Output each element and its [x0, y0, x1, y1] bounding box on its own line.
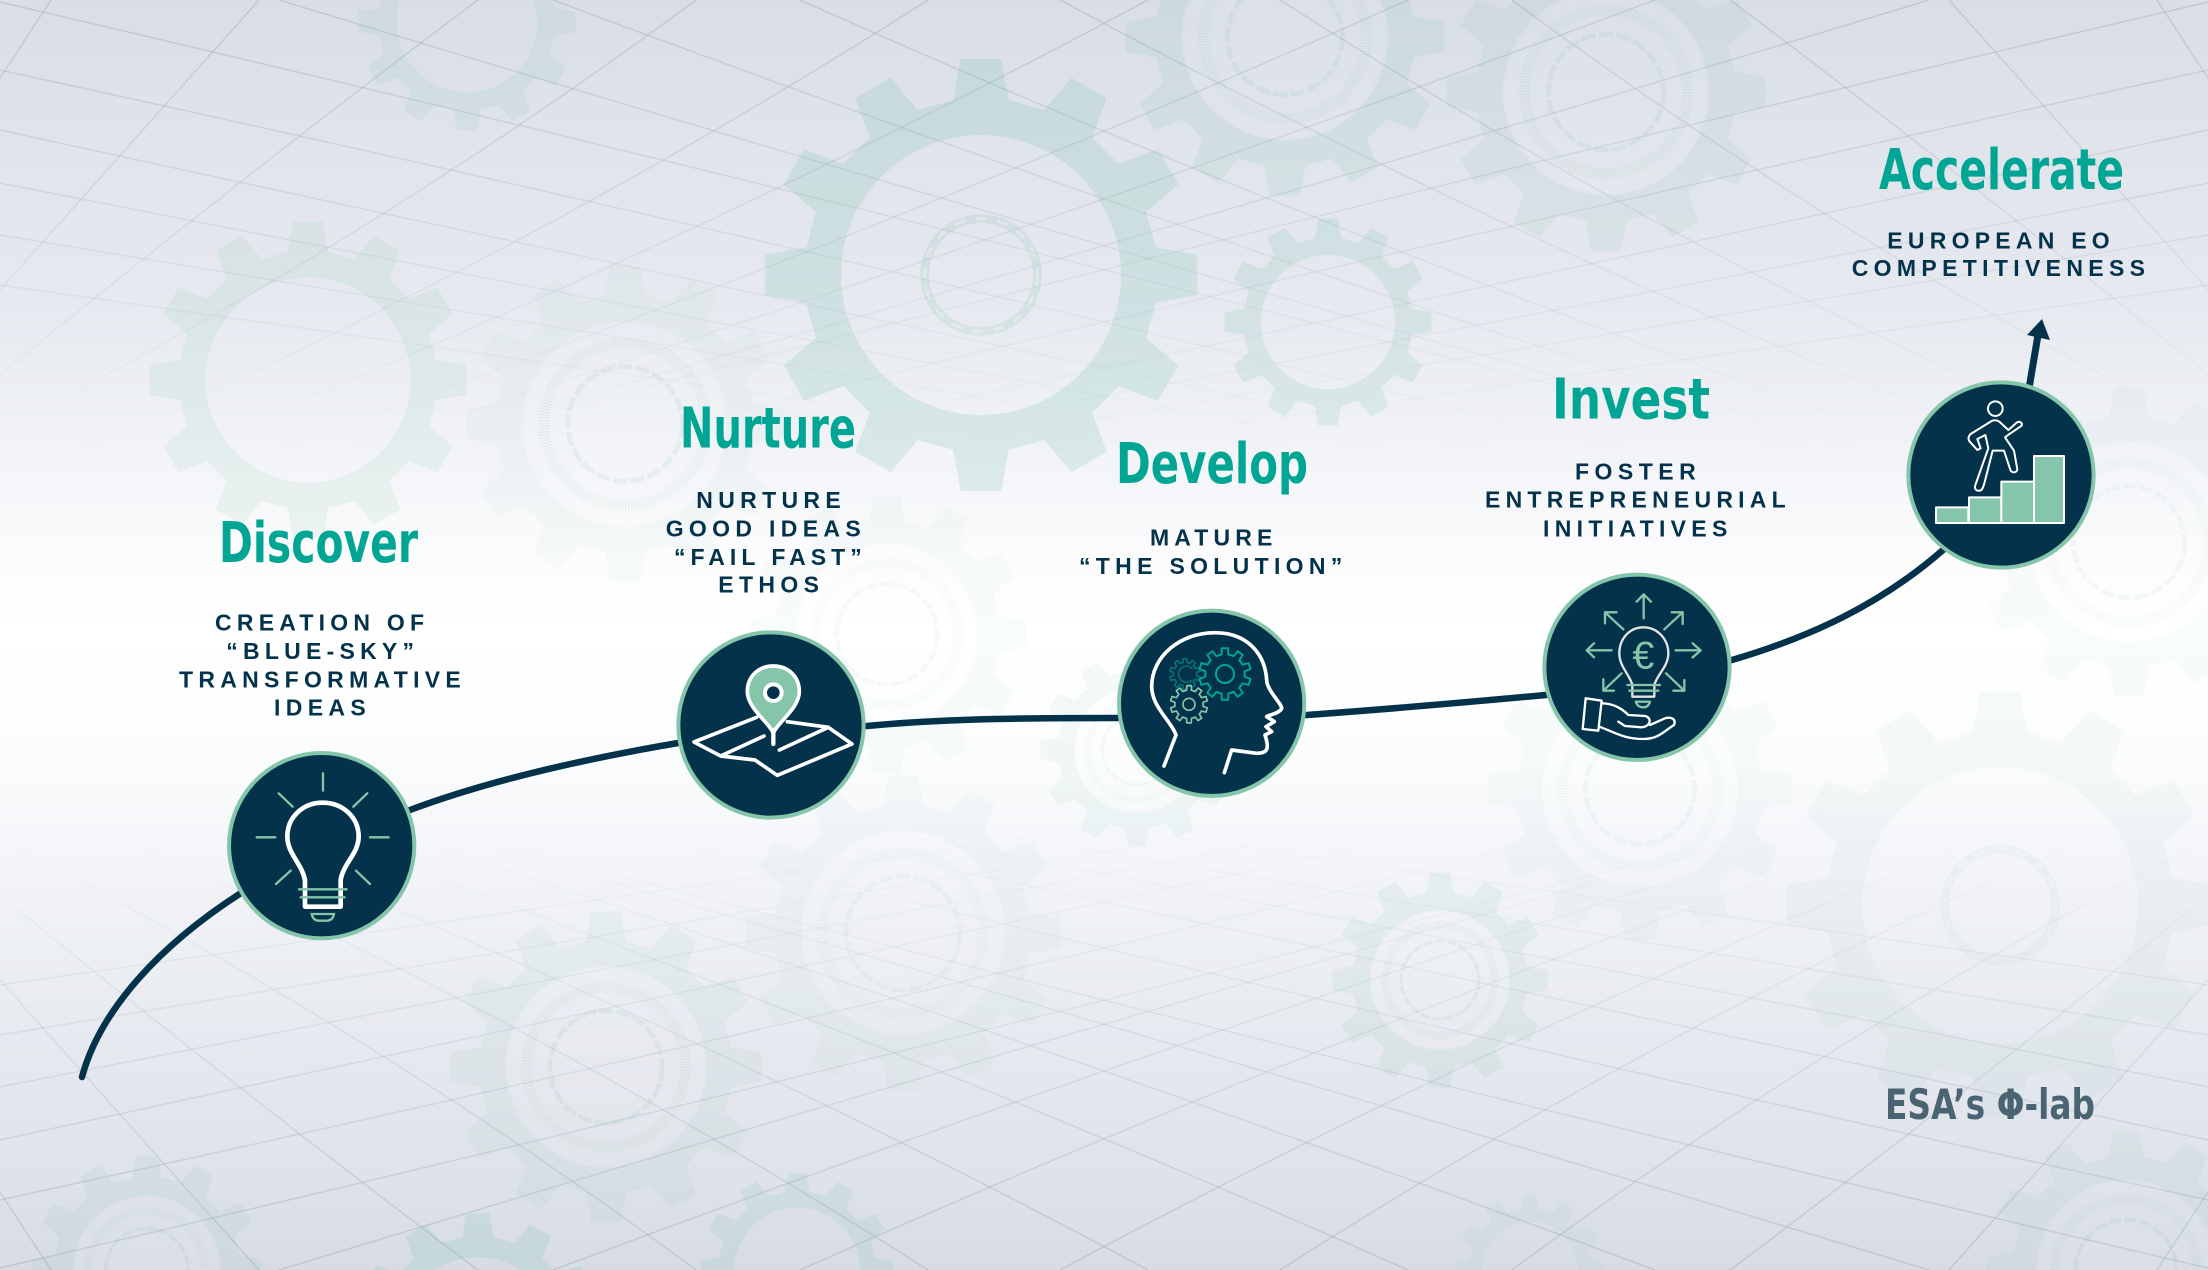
text: invest description: FOSTER	[1575, 458, 1696, 484]
icon: euro bulb and hand	[1544, 575, 1730, 760]
text: nurture description: NURTURE	[696, 487, 841, 513]
text: nurture description: ETHOS	[718, 572, 819, 598]
arrow	[2022, 319, 2050, 430]
text: discover description	[179, 610, 461, 721]
heading: Invest: Invest	[1552, 368, 1710, 433]
journey curve	[82, 475, 2001, 1077]
text: accelerate description: COMPETITIVENESS	[1852, 255, 2145, 281]
text: discover description: TRANSFORMATIVE	[179, 666, 461, 692]
text: nurture description	[666, 487, 862, 598]
text: accelerate description	[1852, 227, 2145, 281]
text: accelerate description: EUROPEAN EO	[1887, 227, 2110, 253]
text: develop description	[1079, 525, 1342, 579]
brand label: ESA’s Φ-lab	[1885, 1080, 2095, 1129]
heading: Nurture: Nurture	[680, 397, 856, 462]
text: invest description: ENTREPRENEURIAL	[1485, 487, 1786, 513]
heading: Develop: Develop	[1116, 432, 1308, 497]
text: invest description	[1485, 458, 1786, 542]
step: invest	[1485, 368, 1786, 760]
step: accelerate	[1852, 138, 2145, 568]
step: develop	[1079, 432, 1342, 796]
text: discover description: “BLUE-SKY”	[226, 638, 414, 664]
text: develop description: “THE SOLUTION”	[1079, 553, 1342, 579]
heading: Discover: Discover	[219, 511, 418, 576]
heading: Accelerate: Accelerate	[1879, 138, 2124, 203]
icon: head with gears	[1119, 611, 1304, 796]
text: nurture description: GOOD IDEAS	[666, 516, 861, 542]
icon: map pin	[678, 632, 864, 818]
step: discover	[179, 511, 461, 938]
icon: light bulb	[229, 753, 414, 938]
text: discover description: IDEAS	[274, 695, 366, 721]
text: develop description: MATURE	[1150, 525, 1272, 551]
step: nurture	[666, 397, 864, 818]
icon: person climbing steps	[1908, 382, 2094, 568]
text: nurture description: “FAIL FAST”	[674, 544, 862, 570]
icon: euro bulb and hand: €	[1632, 633, 1654, 677]
text: invest description: INITIATIVES	[1543, 516, 1727, 542]
text: discover description: CREATION OF	[215, 610, 424, 636]
